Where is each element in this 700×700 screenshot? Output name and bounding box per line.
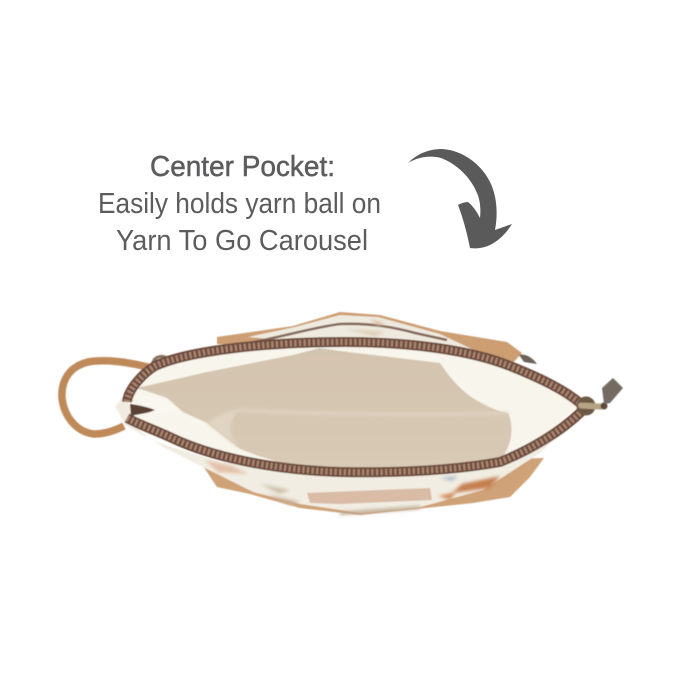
arrow: curved arrow pointing down to pocket (408, 149, 512, 248)
beige interior back wall (137, 348, 512, 471)
zipper top tape (127, 342, 581, 404)
leather back panel bottom (203, 458, 544, 515)
caption line 2: Yarn To Go Carousel (116, 225, 368, 257)
text block: center pocket caption (98, 151, 381, 257)
leather label patch (307, 488, 432, 504)
left tip fabric (115, 396, 135, 428)
zipper top teeth (127, 342, 581, 404)
zipper slider (576, 396, 608, 416)
leather back panel top (217, 312, 522, 366)
left zipper end notch (130, 404, 155, 416)
zipper bottom tape (127, 412, 581, 472)
pocket left fold shading (207, 409, 240, 449)
lining white (127, 344, 578, 471)
floral fabric bottom (116, 407, 565, 513)
zipper bottom teeth (127, 412, 581, 472)
caption line 1: Easily holds yarn ball on (98, 188, 381, 220)
floral prints (205, 319, 500, 515)
strap metal ring (153, 356, 172, 366)
inner pocket fold line (228, 410, 508, 432)
white blob highlight near tip (137, 391, 178, 414)
metal clip right (519, 355, 537, 364)
heading: Center Pocket: Center Pocket: (150, 151, 335, 183)
wrist strap (62, 361, 148, 434)
bag: open zip pouch from above (62, 312, 623, 515)
zipper pull tab (602, 378, 623, 404)
top inner zipper line (240, 324, 447, 345)
floral fabric top (248, 315, 478, 352)
